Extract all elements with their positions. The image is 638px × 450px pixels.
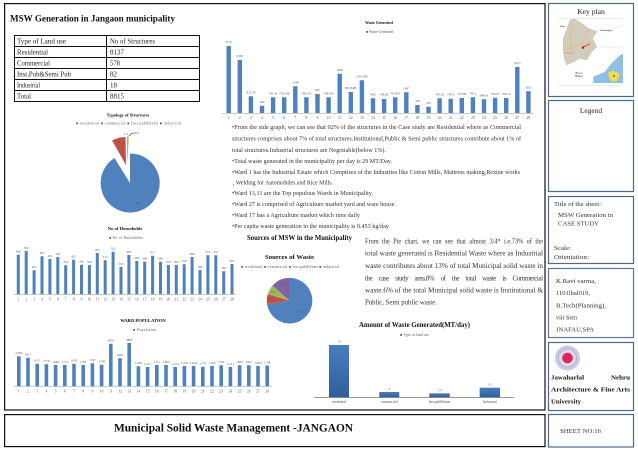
chart: waste generated: 1809 xyxy=(337,68,343,72)
land use table: Type of Land use xyxy=(17,38,66,45)
chart: amount of waste generated: residental xyxy=(332,400,346,404)
chart: typology of structures pie: 1% xyxy=(124,132,128,136)
chart: waste generated: 2500 xyxy=(237,54,243,58)
chart: ward population: 19 xyxy=(183,390,186,394)
chart: number of households xyxy=(14,226,236,302)
chart: waste generated: 1348 xyxy=(292,80,299,84)
chart: number of households: 474 xyxy=(213,250,219,254)
chart: waste generated: 708.68 xyxy=(380,92,389,96)
observations text block: •From the side graph, we can see that 92% of the structures in the Case study are Residential where as Commercial xyxy=(232,124,521,131)
icon: location map: Bay of xyxy=(576,72,583,75)
panel: author details: 1101lbal019, xyxy=(556,290,590,297)
heading: sources of MSW: Sources of MSW in the Municipality xyxy=(247,234,352,242)
land use table: No of Structures xyxy=(110,38,155,45)
chart: number of households: 9 xyxy=(81,298,83,302)
chart: waste generated: 16 xyxy=(393,116,397,120)
chart: number of households: 19 xyxy=(159,298,162,302)
chart: number of households: 16 xyxy=(135,298,139,302)
pie chart explanation paragraph: waste.6% of the total Municipal solid waste is Institutional & xyxy=(365,288,544,294)
chart: ward population: 7 xyxy=(73,390,75,394)
chart: waste generated: 4 xyxy=(261,116,263,120)
chart: ward population: 21 xyxy=(201,390,205,394)
chart: waste generated: 3135 xyxy=(226,40,232,44)
chart: number of households: 5 xyxy=(49,298,51,302)
chart: waste generated: 6 xyxy=(283,116,285,120)
chart: waste generated: 2413 xyxy=(514,61,521,65)
chart: ward population: 1835 xyxy=(236,360,243,364)
chart: number of households: 425 xyxy=(71,254,76,258)
chart: ward population: 1,805 xyxy=(162,360,170,365)
chart: waste generated: 418 xyxy=(415,99,420,103)
chart: sources of waste pie: 73% xyxy=(299,310,305,314)
chart: ward population: 18 xyxy=(173,390,177,394)
chart: waste generated: 24 xyxy=(482,116,486,120)
chart: number of households: 376 xyxy=(166,260,171,264)
chart: amount of waste generated: 19 xyxy=(337,340,341,344)
chart: number of households: 15 xyxy=(127,298,131,302)
chart: number of households: 8 xyxy=(73,298,75,302)
chart: ward population: 1,654 xyxy=(190,361,198,366)
panel: author details xyxy=(548,268,634,338)
chart: waste generated xyxy=(222,21,534,120)
chart: ward population: WARD POPULATION xyxy=(120,318,166,323)
land use table: 8137 xyxy=(110,49,125,56)
chart: ward population: 1,649 xyxy=(135,361,142,366)
chart: sources of waste pie: ■ residential ■ commercial ■ Inst,pub&Semi ■ industrial xyxy=(241,265,339,270)
chart: number of households: 471 xyxy=(150,250,155,254)
chart: typology of structures pie: 0% xyxy=(135,131,139,135)
chart: number of households: 23 xyxy=(190,298,194,302)
chart: number of households: 352 xyxy=(63,260,68,264)
chart: waste generated: 26 xyxy=(504,116,508,120)
chart: number of households: 396 xyxy=(158,256,163,260)
chart: number of households: 473 xyxy=(206,250,211,254)
observations text block: •Ward 17 has a Agriculture market which runs daily xyxy=(232,213,360,219)
chart: number of households: 432 xyxy=(48,254,53,258)
chart: ward population: 2617 xyxy=(25,352,32,356)
chart: waste generated: 8 xyxy=(306,116,308,120)
chart: number of households: 523 xyxy=(111,246,116,250)
chart: ward population: 14 xyxy=(137,390,140,394)
chart: waste generated: 794.67 xyxy=(491,92,500,96)
observations text block: , Welding for Automobiles and Rice Mills. xyxy=(233,180,333,187)
chart: ward population: 5 xyxy=(55,390,57,394)
chart: number of households: 369 xyxy=(182,259,187,263)
chart: number of households: 4 xyxy=(41,298,43,302)
chart: waste generated: 11 xyxy=(338,116,342,120)
chart: number of households: 17 xyxy=(143,298,147,302)
chart: waste generated: 12 xyxy=(349,116,353,120)
chart: ward population: ■ Population xyxy=(133,328,156,332)
panel: author details: B.Tech(Planning), xyxy=(556,302,606,310)
land use table: Residential xyxy=(17,49,48,56)
chart: number of households: 394 xyxy=(142,256,147,260)
chart: amount of waste generated: Amount of Waste Generated(MT/day) xyxy=(359,321,471,329)
chart: sources of waste pie: 6% xyxy=(271,290,275,294)
chart: waste generated: 27 xyxy=(516,116,519,120)
chart: waste generated: Waste Generated xyxy=(365,21,394,25)
chart: ward population: 1917 xyxy=(34,358,41,362)
panel: university: Jawaharlal xyxy=(551,374,584,382)
land use table xyxy=(14,36,200,102)
panel: key plan: Key plan xyxy=(577,7,605,16)
chart: waste generated: 353 xyxy=(426,101,431,105)
chart: waste generated: 684.81 xyxy=(480,94,489,98)
bottom title bar xyxy=(5,415,545,447)
chart: waste generated: 993.8485 xyxy=(345,86,357,90)
chart: number of households: 12 xyxy=(103,298,107,302)
panel: legend xyxy=(548,100,634,192)
chart: typology of structures pie: Typology of Structures xyxy=(107,112,150,118)
chart: number of households: 20 xyxy=(167,298,170,302)
chart: ward population: 12 xyxy=(118,390,122,394)
observations text block: •Per capita waste generation in the municipality is 0.453 kg/day xyxy=(232,224,389,230)
observations text block: structures comprises about 7% of total structures.Institutional,Public & Semi public structures contribute about 1% of xyxy=(232,136,521,143)
chart: number of households: No of Households xyxy=(108,226,142,231)
panel: title of the sheet: CASE STUDY xyxy=(558,220,599,228)
chart: ward population: 16 xyxy=(155,390,159,394)
chart: ward population: 1,511 xyxy=(227,362,234,367)
land use table: 82 xyxy=(110,71,118,78)
land use table: 18 xyxy=(110,82,118,89)
chart: ward population: 11 xyxy=(109,390,113,394)
chart: waste generated: 23 xyxy=(471,116,475,120)
chart: amount of waste generated: commercial xyxy=(381,400,398,404)
chart: waste generated: 28 xyxy=(527,116,530,120)
chart: ward population: 1748 xyxy=(98,360,105,364)
chart: ward population: 1790 xyxy=(218,360,225,364)
panel: title of the sheet: Scale: xyxy=(554,245,571,252)
observations text block xyxy=(232,124,521,230)
chart: ward population: 9 xyxy=(92,390,94,394)
chart: ward population: 1768 xyxy=(264,360,271,364)
chart: waste generated: 825.58 xyxy=(247,90,256,94)
chart: waste generated: 1305.985 xyxy=(356,74,368,78)
chart: amount of waste generated: 3.5 xyxy=(488,382,492,386)
chart: amount of waste generated xyxy=(314,321,514,405)
chart: ward population: 10 xyxy=(100,390,104,394)
chart: sources of waste pie xyxy=(241,254,339,323)
chart: ward population: 23 xyxy=(219,390,223,394)
chart: number of households: 14 xyxy=(119,298,123,302)
pie chart explanation paragraph: From the Pie chart, we can see that almost 3/4* i.e.73% of the xyxy=(365,238,543,246)
chart: typology of structures pie: 92% xyxy=(135,201,141,205)
panel: university: University xyxy=(551,398,582,406)
chart: amount of waste generated: Inst,pub&Semi xyxy=(429,400,450,405)
panel: key plan xyxy=(548,4,634,96)
chart: ward population: 1,763 xyxy=(208,361,216,366)
chart: waste generated: 991 xyxy=(315,88,320,92)
chart: sources of waste pie: Sources of Waste xyxy=(265,254,314,261)
chart: ward population: 24 xyxy=(229,390,232,394)
chart: waste generated: 466 xyxy=(260,100,265,104)
panel: university: Nehru xyxy=(611,374,630,382)
chart: ward population: 22 xyxy=(210,390,214,394)
chart: waste generated: 797.88 xyxy=(457,92,467,96)
chart: number of households: 483 xyxy=(127,250,132,254)
chart: typology of structures pie: 7% xyxy=(116,140,120,144)
chart: number of households: 6 xyxy=(57,298,59,302)
chart: number of households: 454 xyxy=(55,252,61,256)
chart: ward population: 1778 xyxy=(43,359,50,363)
panel: university: Architecture & Fine Arts xyxy=(551,386,630,394)
chart: number of households: 293 xyxy=(32,265,37,269)
chart: waste generated: 25 xyxy=(493,116,497,120)
land use table: Total xyxy=(17,93,31,100)
chart: amount of waste generated: Industrial xyxy=(483,400,497,404)
chart: number of households: 27 xyxy=(222,298,226,302)
chart: ward population: 1,656 xyxy=(181,361,188,366)
chart: amount of waste generated: 2 xyxy=(389,387,391,391)
chart: ward population: 28 xyxy=(265,390,269,394)
land use table: Industrial xyxy=(17,82,40,89)
chart: waste generated: 778.108 xyxy=(279,92,290,96)
observations text block: •Ward 27 is comprised of Agriculture market yard and ware house. xyxy=(232,201,397,208)
chart: number of households: 28 xyxy=(230,298,234,302)
chart: ward population: 1579 xyxy=(200,362,206,366)
chart: waste generated: 2 xyxy=(239,116,241,120)
observations text block: total structures.Industrial structures are Negotiable(below 1%). xyxy=(232,147,387,154)
chart: number of households: 417 xyxy=(103,255,108,259)
chart: waste generated: 13 xyxy=(360,116,364,120)
chart: number of households: 467 xyxy=(40,251,45,255)
chart: waste generated: 15 xyxy=(382,116,386,120)
chart: waste generated: 19 xyxy=(427,116,430,120)
chart: waste generated: 1052 xyxy=(525,86,532,90)
land use table: Inst,Pub&Semi Pub xyxy=(17,71,72,78)
icon: location map xyxy=(559,18,623,86)
chart: waste generated: 17 xyxy=(405,116,408,120)
bottom title bar: Municipal Solid Waste Management -JANGAON xyxy=(114,422,354,434)
chart: ward population: 2462 xyxy=(117,353,124,357)
chart: ward population: 25 xyxy=(238,390,242,394)
chart: number of households: 21 xyxy=(175,298,178,302)
chart: ward population: 4 xyxy=(46,390,48,394)
chart: number of households: 2 xyxy=(25,298,27,302)
chart: typology of structures pie xyxy=(76,112,181,212)
icon: location map: Maha xyxy=(560,25,566,28)
observations text block: •Ward 13,11 are the Top populous Wards in Municipality. xyxy=(232,191,374,197)
chart: number of households: 18 xyxy=(151,298,155,302)
chart: number of households: 3 xyxy=(33,298,35,302)
chart: typology of structures pie: ■ residential ■ commercial ■ Inst,pub&Semi ■ industrial xyxy=(76,122,181,126)
chart: waste generated: 768.13 xyxy=(502,92,511,96)
chart: number of households: 498 xyxy=(190,252,195,256)
chart: waste generated: 7 xyxy=(294,116,296,120)
chart: amount of waste generated: 1.5 xyxy=(438,388,442,392)
observations text block: •Total waste generated in the municipality per day is 29 MT/Day. xyxy=(232,159,393,165)
chart: waste generated: 21 xyxy=(449,116,453,120)
chart: ward population: 1747 xyxy=(89,358,96,362)
chart: waste generated: 749.4 xyxy=(447,92,455,96)
chart: waste generated: 798.833 xyxy=(323,92,334,96)
chart: waste generated: 1087 xyxy=(403,86,410,90)
chart: sources of waste pie: 8% xyxy=(268,297,273,301)
panel: legend: Legend xyxy=(580,106,602,115)
chart: number of households: 24 xyxy=(198,298,202,302)
chart: number of households: 7 xyxy=(65,298,67,302)
icon: location map: Chhattisgarh xyxy=(600,29,613,32)
chart: ward population: 26 xyxy=(247,390,251,394)
chart: ward population: 3 xyxy=(36,390,38,394)
chart: ward population: 27 xyxy=(256,390,260,394)
chart: number of households: 367 xyxy=(230,259,235,263)
icon: location map: Bengal xyxy=(575,75,583,78)
chart: ward population: 1781 xyxy=(80,360,87,364)
panel: author details: JNAFAU,SPA xyxy=(556,326,594,334)
panel: title of the sheet: Orientation: xyxy=(554,254,589,261)
land use table: Commercial xyxy=(17,60,50,67)
chart: waste generated: 1 xyxy=(228,116,230,120)
panel: university xyxy=(548,342,634,410)
chart: number of households: 25 xyxy=(206,298,210,302)
chart: waste generated: 10 xyxy=(327,116,331,120)
chart: waste generated: 5 xyxy=(272,116,274,120)
chart: waste generated: 795.2 xyxy=(469,92,477,96)
panel: title of the sheet: MSW Generation in xyxy=(558,212,614,219)
panel: sheet number xyxy=(548,414,634,447)
chart: number of households: 466 xyxy=(16,250,21,254)
pie chart explanation paragraph: waste contributes about 13% of total Municipal solid waste in xyxy=(365,263,544,270)
pie chart explanation paragraph: Public, Semi public waste. xyxy=(365,300,437,306)
chart: waste generated: 789.555 xyxy=(301,92,312,96)
pie chart explanation paragraph: the case study area.8% of the total waste is Commercial xyxy=(365,276,543,282)
chart: waste generated: 20 xyxy=(438,116,442,120)
chart: ward population: 1,574 xyxy=(172,362,179,367)
chart: number of households: 26 xyxy=(214,298,218,302)
chart: ward population: 1 xyxy=(18,390,20,394)
chart: number of households: 363 xyxy=(174,260,179,264)
icon: university logo xyxy=(555,346,580,370)
chart: waste generated: 14 xyxy=(371,116,375,120)
chart: number of households: 13 xyxy=(111,298,115,302)
chart: waste generated: 785.36 xyxy=(269,92,278,96)
chart: ward population: 2 xyxy=(27,390,29,394)
main panel frame xyxy=(5,4,545,410)
chart: amount of waste generated: ■ Type of land use xyxy=(400,333,429,337)
pie chart explanation paragraph xyxy=(365,238,544,306)
chart: waste generated: 746.1 xyxy=(369,92,377,96)
chart: ward population: 1648 xyxy=(52,360,59,364)
chart: number of households: 503 xyxy=(95,248,100,252)
chart: ward population: 1711 xyxy=(154,360,160,364)
chart: ward population: 13 xyxy=(127,390,131,394)
chart: waste generated: 22 xyxy=(460,116,464,120)
chart: waste generated: 795.895 xyxy=(390,92,401,96)
chart: waste generated: 18 xyxy=(416,116,419,120)
chart: number of households: 363 xyxy=(79,260,84,264)
land use table: 8815 xyxy=(110,93,125,100)
chart: number of households: 356 xyxy=(87,260,92,264)
chart: waste generated: 785.36 xyxy=(435,92,444,96)
panel: author details: viii Sem xyxy=(556,314,578,322)
observations text block: •Ward 1 has the Industrial Estate which Comprises of the Industries like Cotton Mills, Mattress making,Rexine works xyxy=(232,169,521,176)
chart: number of households: 284 xyxy=(221,266,226,270)
chart: ward population: 8 xyxy=(82,390,84,394)
chart: waste generated: ■ Waste Generated xyxy=(366,30,394,34)
chart: number of households: 406 xyxy=(134,256,140,260)
chart: ward population: 20 xyxy=(192,390,196,394)
chart: ward population: 1835 xyxy=(71,358,78,362)
panel: sheet number: SHEET NO:16 xyxy=(560,428,602,435)
chart: waste generated: 3 xyxy=(250,116,252,120)
chart: ward population: 17 xyxy=(164,390,168,394)
chart: ward population: 1,515 xyxy=(144,362,152,367)
panel: title of the sheet xyxy=(548,196,634,264)
title: MSW Generation in Jangaon municipality xyxy=(10,14,175,24)
chart: number of households: 22 xyxy=(182,298,186,302)
land use table: 578 xyxy=(110,60,121,67)
panel: title of the sheet: Title of the sheet: xyxy=(554,201,601,208)
chart: ward population: 3885 xyxy=(126,338,133,342)
chart: number of households: 306 xyxy=(198,265,203,269)
chart: waste generated: 9 xyxy=(317,116,319,120)
chart: ward population: 3859 xyxy=(108,338,114,342)
chart: number of households: ■ No of Households xyxy=(109,236,144,240)
chart: ward population: 6 xyxy=(64,390,66,394)
chart: sources of waste pie: 13% xyxy=(279,282,285,286)
chart: ward population: 1714 xyxy=(62,360,68,364)
panel: author details: K.Ravi varma, xyxy=(556,278,596,285)
chart: ward population: 1,804 xyxy=(254,361,262,366)
chart: ward population: 2.699 xyxy=(15,351,23,355)
chart: ward population: 1845 xyxy=(246,360,252,364)
pie chart explanation paragraph: total waste generated is Residential Waste where as Industrial xyxy=(365,251,543,258)
chart: number of households: 1 xyxy=(17,298,19,302)
chart: number of households: 335 xyxy=(119,262,124,266)
chart: number of households: 526 xyxy=(24,246,29,250)
chart: number of households: 10 xyxy=(88,298,91,302)
chart: ward population xyxy=(14,318,272,394)
chart: number of households: 11 xyxy=(96,298,99,302)
chart: ward population: 15 xyxy=(146,390,150,394)
